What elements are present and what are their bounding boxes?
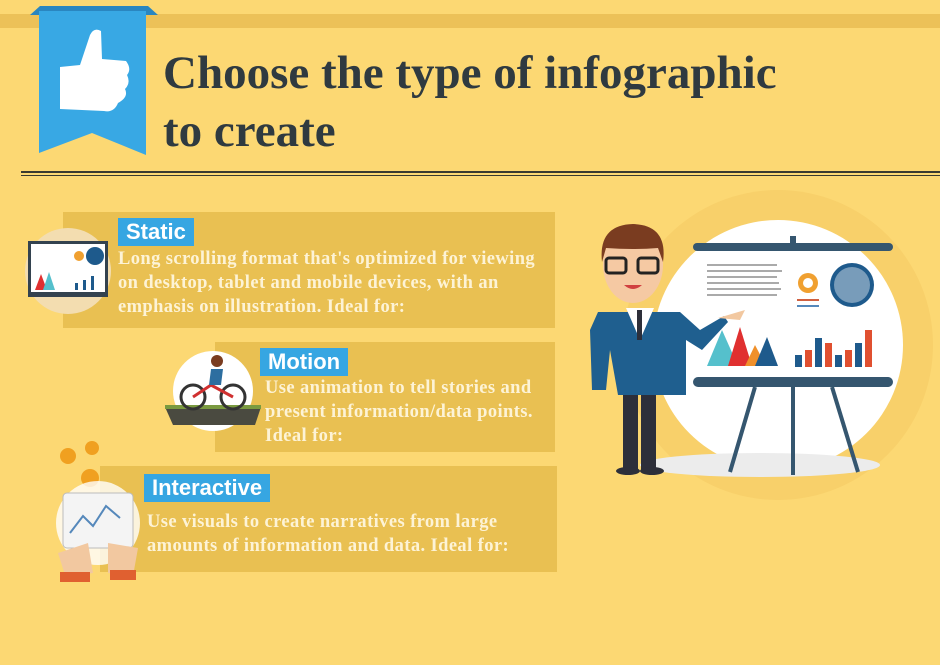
- text: interactive description: [147, 512, 509, 556]
- panel: static: [63, 212, 555, 328]
- title: [163, 47, 777, 157]
- text: motion description: [265, 378, 533, 446]
- text: static description: Long scrolling format that's optimized for viewing: [118, 249, 535, 269]
- icon: static laptop: [25, 228, 111, 314]
- text: motion description: Use animation to tell stories and: [265, 378, 532, 398]
- text: static description: [118, 249, 535, 317]
- panel: interactive: [100, 466, 557, 572]
- illustration: presenter: [590, 190, 933, 500]
- text: interactive description: amounts of information and data. Ideal for:: [147, 536, 509, 556]
- icon: cyclist: [165, 351, 261, 431]
- icon: thumbs up: [60, 30, 129, 111]
- text: interactive description: Use visuals to create narratives from large: [147, 512, 497, 532]
- icon: tablet with coins: [56, 441, 140, 582]
- man: [623, 390, 638, 470]
- title: to create: [163, 105, 336, 157]
- text: motion description: Ideal for:: [265, 426, 344, 446]
- text: static description: on desktop, tablet and mobile devices, with an: [118, 273, 499, 293]
- panel: motion: [215, 342, 555, 452]
- divider: [21, 171, 940, 173]
- title: Choose the type of infographic: [163, 47, 777, 99]
- ribbon with thumbs up icon: [30, 6, 158, 155]
- text: static description: emphasis on illustration. Ideal for:: [118, 297, 405, 317]
- text: motion description: present information/data points.: [265, 402, 533, 422]
- board: [693, 243, 893, 251]
- label: motion: Motion: [268, 349, 340, 374]
- label: static: Static: [126, 219, 186, 244]
- top band: [0, 14, 940, 28]
- label: interactive: Interactive: [152, 475, 262, 500]
